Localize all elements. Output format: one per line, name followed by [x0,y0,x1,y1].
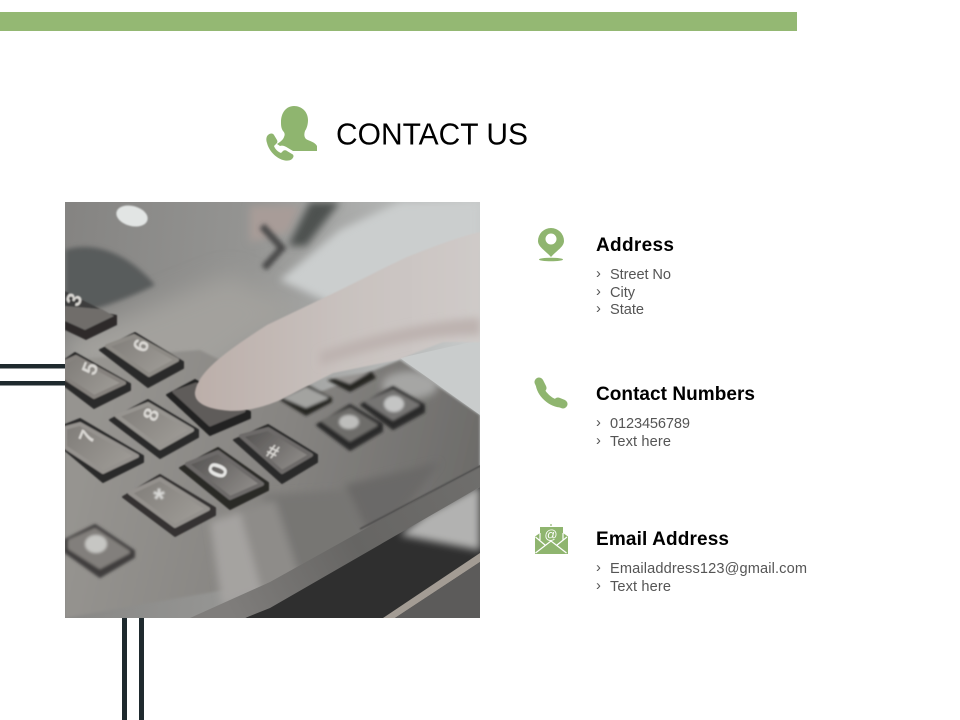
email list: Text here [610,579,671,595]
title: CONTACT US [336,116,528,152]
key 7 [65,419,143,482]
email list: › [596,560,601,576]
contact numbers section [539,382,755,450]
key 5 [65,353,130,408]
icon: person with phone [266,106,317,161]
phone body [65,350,480,618]
finger [195,232,480,411]
email list: › [596,578,601,594]
key star: * [153,483,165,516]
key 0: 0 [201,458,234,483]
small keys right [317,405,382,450]
address list: Street No [610,267,671,283]
key 0 [180,448,268,509]
lower background [245,487,480,618]
icon: location pin [538,228,564,261]
address list: › [596,266,601,282]
icon: phone handset [539,382,563,404]
pale highlight beside finger [382,371,438,399]
address list: City [610,285,636,301]
contact numbers list [596,415,690,450]
heading: contact numbers: Contact Numbers [596,384,755,405]
decorative bottom lines [122,617,144,720]
contact numbers list: 0123456789 [610,416,690,432]
blurred upper background [65,202,468,358]
email section [535,524,807,595]
contact numbers list: › [596,433,601,449]
icon: open envelope with at sign: @ [544,527,558,542]
key 5: 5 [78,359,104,378]
key 8 [110,400,198,458]
decorative left lines [0,364,66,386]
key 3 [62,290,117,340]
icon: open envelope with at sign [535,524,568,554]
heading: address: Address [596,235,674,256]
contact numbers list: Text here [610,434,671,450]
key star [123,475,215,536]
front edge of phone [190,465,480,618]
address list: › [596,284,601,300]
rays below keys [209,469,426,602]
key 8: 8 [139,405,165,424]
email list [596,560,807,595]
email list: Emailaddress123@gmail.com [610,561,807,577]
heading: email address: Email Address [596,529,729,550]
key hash [234,425,317,483]
bottom left key [65,525,134,577]
key under finger [167,380,250,435]
key 3: 3 [62,290,88,309]
address section [538,228,674,318]
photo: finger pressing telephone keypad [62,202,480,618]
finger shading [320,318,480,366]
light surface behind finger [401,348,480,415]
address list: State [610,302,644,318]
key 6: 6 [129,336,155,355]
top green bar [0,12,797,31]
keypad keys [62,290,424,577]
key 6 [100,333,183,387]
address list [596,266,671,318]
key 7: 7 [75,427,101,446]
key hash: # [263,440,282,465]
address list: › [596,301,601,317]
contact numbers list: › [596,415,601,431]
